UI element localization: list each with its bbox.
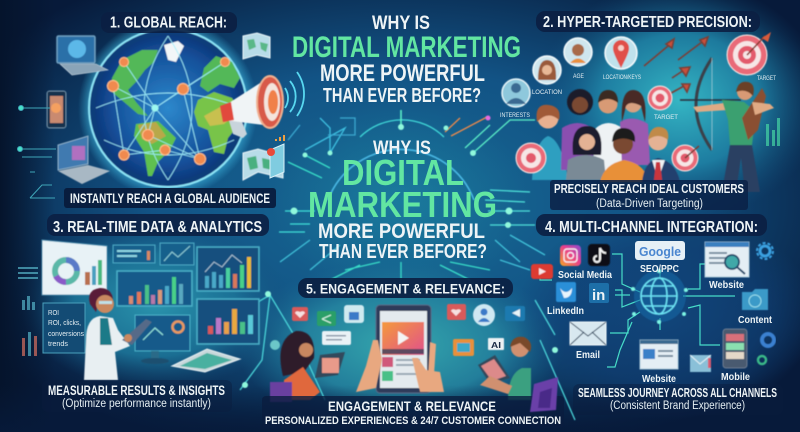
- tablet device: [172, 349, 240, 372]
- dashboard: center bar chart: [117, 271, 192, 306]
- avatar labels: LOCATION: [532, 89, 562, 96]
- icon: mobile: [723, 329, 747, 368]
- icon: laptop top: [57, 36, 108, 75]
- avatar labels: INTERESTS: [500, 112, 531, 119]
- caption: precisely reach: (Data-Driven Targeting): [596, 198, 703, 210]
- icon: content folder: [742, 289, 768, 310]
- purple laptop: [530, 377, 558, 412]
- icon: gear top: [757, 243, 773, 259]
- caption: seamless journey: [573, 384, 783, 415]
- dashboard: metrics text panel: conversions: [48, 331, 84, 338]
- circuit nodes: [242, 116, 558, 388]
- heading: 1. global reach: 1. GLOBAL REACH:: [110, 14, 227, 32]
- icon: twitter: [556, 282, 576, 302]
- title block center: [308, 138, 497, 263]
- icon: email: [570, 322, 606, 345]
- left side mini widgets: [18, 267, 38, 356]
- people group: [532, 89, 680, 182]
- heading: hyper-targeted precision: 2. HYPER-TARGETED PRECISION:: [543, 14, 752, 31]
- label: linkedin: LinkedIn: [547, 305, 584, 317]
- icon: laptop bottom: [58, 136, 110, 184]
- google search box: Google: [639, 244, 681, 259]
- dashboard: metrics text panel: [43, 303, 85, 353]
- caption: measurable results: (Optimize performance instantly): [62, 398, 211, 410]
- globe: [78, 18, 258, 198]
- caption: instantly reach: [64, 188, 276, 208]
- icon: instagram: [560, 245, 581, 266]
- caption: engagement and personalized experiences: PERSONALIZED EXPERIENCES & 24/7 CUSTOMER CONNECTION: [265, 415, 561, 427]
- icon: megaphone: [220, 76, 283, 138]
- target: small: [648, 86, 672, 110]
- panel 2: hyper-targeted precision: [500, 11, 780, 210]
- monitor: [135, 315, 190, 364]
- center title: more powerful: MORE POWERFUL: [318, 220, 485, 243]
- title: why is: WHY IS: [372, 13, 430, 34]
- center title: why is: WHY IS: [373, 138, 431, 159]
- center title: than ever before: THAN EVER BEFORE?: [319, 240, 487, 263]
- avatar labels: AGE: [573, 73, 585, 80]
- heading: 1. global reach: [101, 12, 237, 33]
- signal arcs: [285, 72, 304, 116]
- left circuit traces: [18, 106, 56, 198]
- icon: mini email: [690, 355, 711, 372]
- icon: hub globe: [631, 269, 688, 324]
- caption: precisely reach: PRECISELY REACH IDEAL CUSTOMERS: [554, 181, 744, 196]
- icon: youtube: [531, 264, 553, 279]
- dashboard: right bottom chart: [197, 299, 259, 344]
- mini bar chart: [766, 118, 780, 146]
- panel 1: global reach: [18, 12, 304, 208]
- heading: engagement: 5. ENGAGEMENT & RELEVANCE:: [306, 280, 505, 296]
- panel 5: engagement and relevance: [262, 278, 564, 428]
- avatar labels: LOCATION/KEYS: [603, 74, 641, 81]
- icon: gears bottom: [758, 334, 774, 364]
- connector lines: [540, 254, 735, 367]
- caption: precisely reach: [550, 180, 748, 210]
- avatar labels: [500, 73, 641, 119]
- label: content: Content: [738, 314, 772, 326]
- dashboard: metrics text panel: trends: [48, 341, 68, 348]
- title block top: [292, 13, 521, 107]
- icon: map top: [243, 33, 270, 59]
- caption: instantly reach: INSTANTLY REACH A GLOBAL AUDIENCE: [70, 190, 270, 206]
- icon: tiktok: [588, 244, 610, 266]
- analyst: [84, 288, 152, 380]
- label: email: Email: [576, 349, 600, 361]
- label: mobile: Mobile: [721, 371, 750, 383]
- caption: engagement and personalized experiences: ENGAGEMENT & RELEVANCE: [328, 398, 496, 414]
- dashboard: metrics text panel: ROI: [48, 310, 59, 317]
- icon: map bottom: [243, 149, 283, 180]
- label: seo/ppc: SEO/PPC: [640, 263, 679, 275]
- social icons: [292, 304, 525, 356]
- title: than ever before: THAN EVER BEFORE?: [323, 84, 481, 107]
- dashboard: donut screen: [42, 240, 107, 295]
- heading: real-time data: 3. REAL-TIME DATA & ANALYTICS: [53, 219, 262, 236]
- panel 4: multi-channel integration: [530, 214, 783, 415]
- tablet with video: [376, 305, 431, 393]
- dashboard: metrics text panel: ROI, clicks,: [48, 320, 81, 327]
- label: social media: Social Media: [558, 269, 612, 281]
- caption: seamless journey: (Consistent Brand Experience): [610, 400, 745, 412]
- icon: website search: [705, 242, 749, 277]
- caption: measurable results: MEASURABLE RESULTS & INSIGHTS: [48, 383, 225, 398]
- title: digital marketing: DIGITAL MARKETING: [292, 31, 521, 64]
- icon: linkedin: in: [592, 287, 605, 304]
- dashboard: right top chart: [197, 247, 259, 291]
- small bars and map: [267, 135, 285, 178]
- label: website: Website: [642, 373, 676, 385]
- title: more powerful: MORE POWERFUL: [320, 60, 485, 87]
- central circuit board decoration: [230, 110, 575, 420]
- center title: marketing: MARKETING: [308, 184, 497, 225]
- label: target: TARGET: [757, 75, 776, 82]
- label: target: TARGET: [654, 114, 678, 121]
- center title: digital: DIGITAL: [342, 152, 464, 193]
- target: lower and left: [516, 143, 699, 173]
- woman with tablet: [270, 331, 345, 402]
- dashboard: top small panels: [113, 243, 194, 265]
- label: website: Website: [709, 279, 744, 291]
- icon: linkedin: [589, 283, 609, 304]
- caption: measurable results: [42, 380, 232, 412]
- caption: engagement and personalized experiences: [262, 396, 564, 428]
- icon: website bottom: [640, 340, 678, 369]
- flying arrows: [644, 37, 708, 98]
- icon: phone: [47, 91, 66, 128]
- hands: [356, 340, 444, 392]
- audience avatars: [502, 37, 637, 107]
- target: large: [727, 32, 771, 75]
- panel 3: real-time data and analytics: [18, 214, 269, 412]
- heading: hyper-targeted precision: [536, 11, 760, 32]
- label: AI: AI: [491, 341, 501, 350]
- man with tablet: [478, 337, 531, 400]
- heading: multi-channel: [536, 214, 767, 236]
- heading: real-time data: [47, 214, 269, 236]
- archer: [680, 58, 774, 192]
